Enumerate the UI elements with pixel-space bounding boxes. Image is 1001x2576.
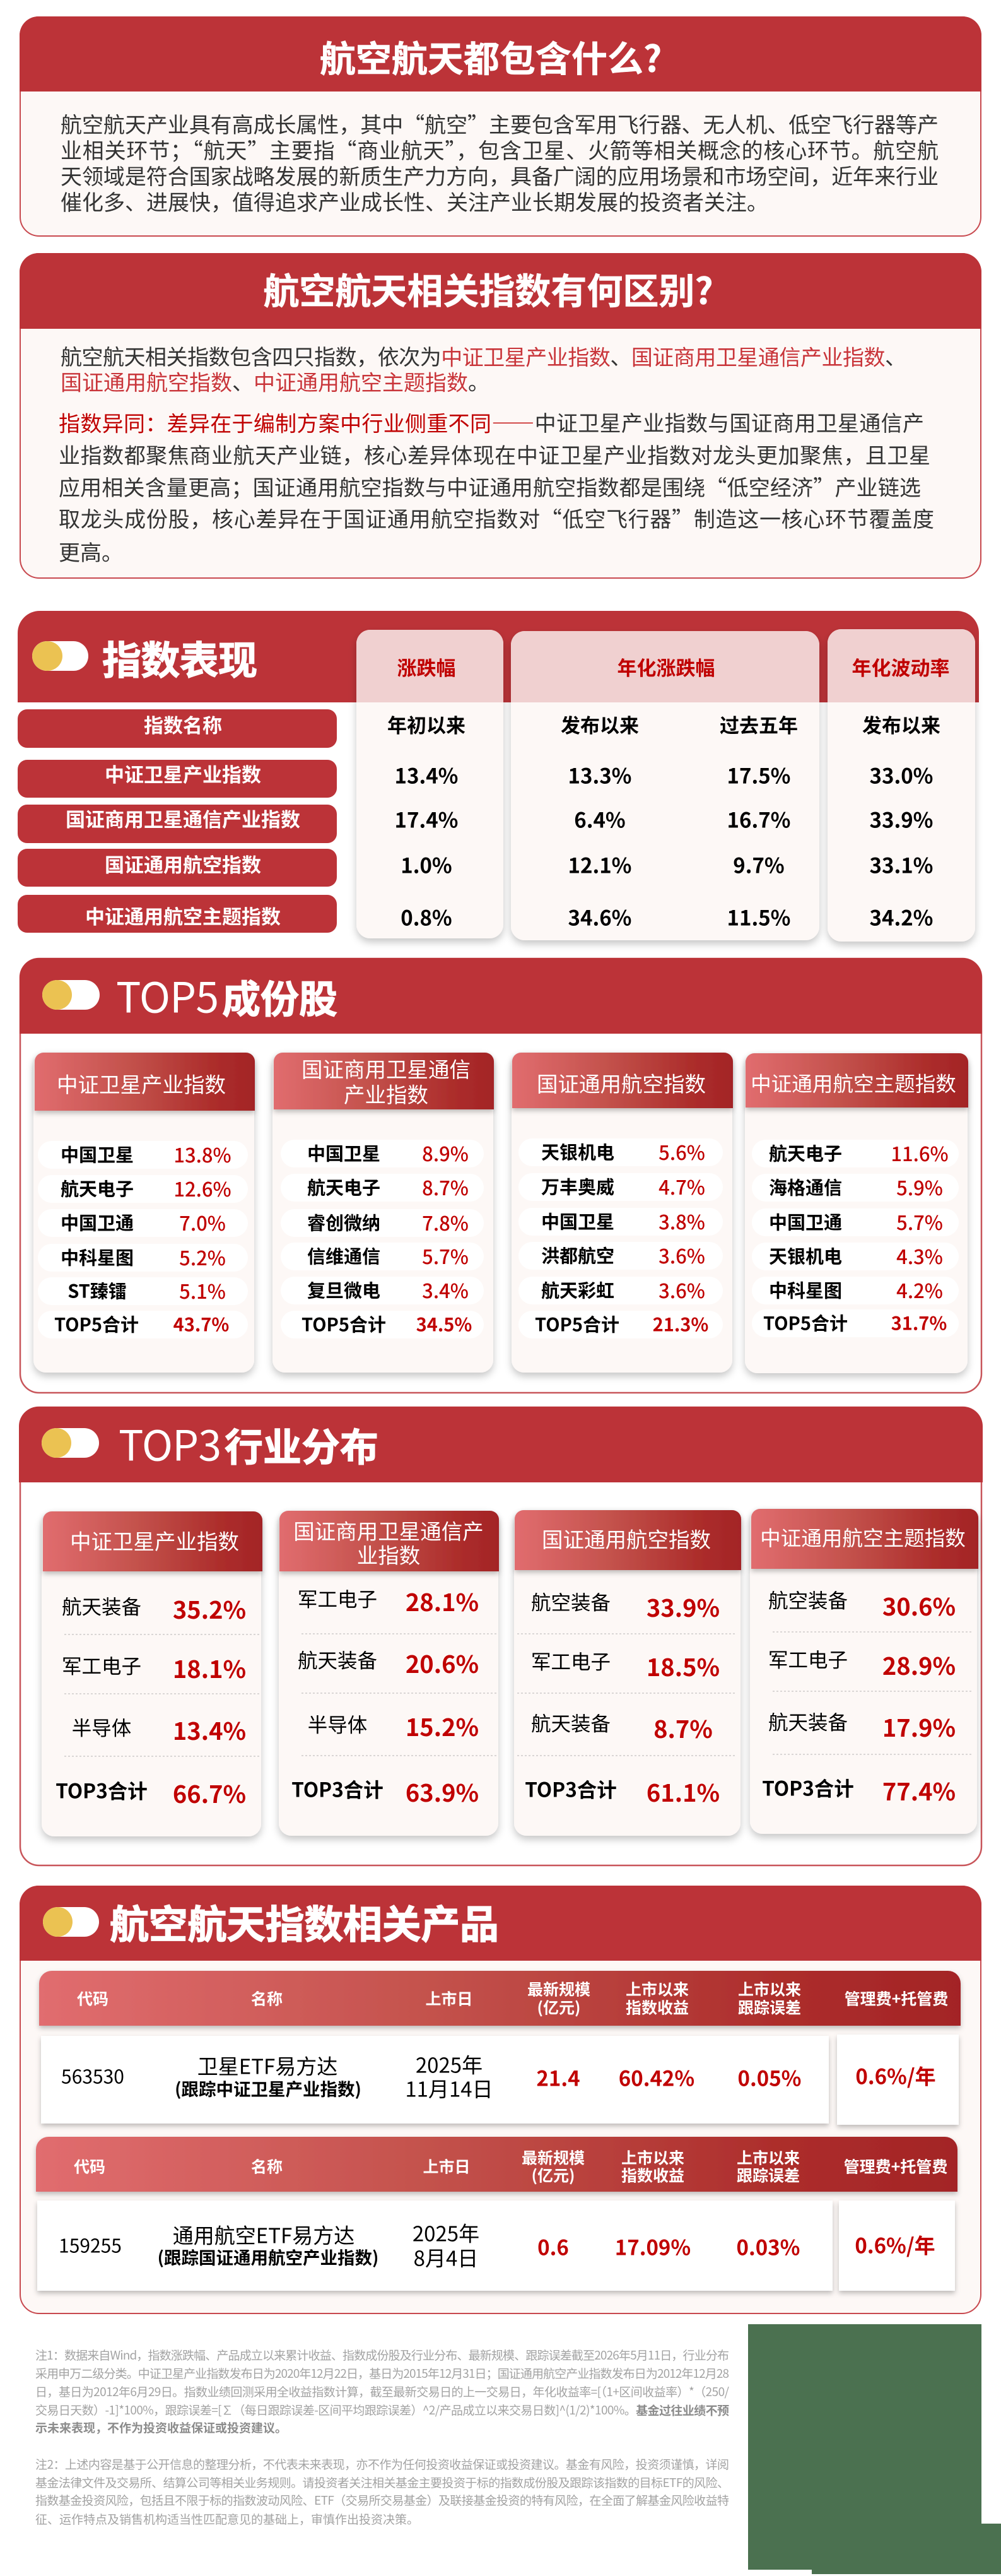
panel: what aerospace includes [20,16,981,236]
card: CNI commercial satellite communication index: 产业指数 [344,1078,428,1109]
card: CNI general aviation index [514,1510,741,1836]
card: CSI general aviation theme index: 中证通用航空主题指数 [751,1068,956,1097]
table: general aviation ETF: 通用航空ETF易方达 [173,2219,354,2249]
column: annualized change: 6.4% [574,804,626,834]
card: CNI commercial satellite communication index: 7.8% [422,1208,469,1236]
table: general aviation ETF: 上市以来 [737,2146,800,2168]
table: satellite ETF [39,1971,961,2125]
card: CNI commercial satellite communication index: 国证商用卫星通信产 [293,1515,484,1545]
card: CNI general aviation index: 国证通用航空指数 [542,1523,711,1554]
card: CNI commercial satellite communication index: 20.6% [406,1645,479,1680]
text block: index similarities and differences: 更高。 [59,536,123,567]
table: satellite ETF: 卫星ETF易方达 [197,2050,337,2080]
column: year to date change: 0.8% [401,901,452,931]
text block: aerospace description: 航空航天产业具有高成长属性，其中“航空”主要包含军用飞行器、无人机、低空飞行器等产 [61,108,939,139]
card: CNI general aviation index: 8.7% [653,1710,713,1745]
text block: index similarities and differences: 指数异同：差异在于编制方案中行业侧重不同——中证卫星产业指数与国证商用卫星通信产 [59,406,924,437]
card: CSI general aviation theme index: 4.3% [896,1241,943,1270]
card: CNI general aviation index: 航空装备 [531,1586,611,1616]
card: CSI general aviation theme index: 30.6% [882,1588,956,1622]
card: CNI commercial satellite communication index: 半导体 [308,1709,367,1738]
card: CSI satellite industry index: 7.0% [179,1208,226,1236]
table: satellite ETF: 2025年 [416,2048,483,2079]
column: year to date change: 年初以来 [387,710,465,738]
card: CSI satellite industry index: 中国卫通 [61,1209,134,1236]
card: CSI satellite industry index: 18.1% [173,1650,246,1685]
table: satellite ETF: 60.42% [619,2062,694,2093]
text block: four indices: 航空航天相关指数包含四只指数，依次为中证卫星产业指数、国证商用卫星通信产业指数、 [61,340,906,371]
card: CNI general aviation index: 33.9% [647,1589,720,1624]
column: annualized volatility: 33.9% [870,804,933,834]
table: general aviation ETF: 名称 [251,2154,283,2177]
card: CNI general aviation index: 天银机电 [541,1138,614,1165]
table: general aviation ETF: 跟踪误差 [737,2163,800,2186]
card: CSI general aviation theme index: 5.7% [896,1207,943,1236]
column: year to date change: 13.4% [395,760,458,790]
table: satellite ETF: 0.05% [738,2062,801,2093]
icon: toggle [42,1428,99,1458]
heading: index performance: 指数表现 [102,629,257,685]
text block: aerospace description: 天领域是符合国家战略发展的新质生产力方向，具备广阔的应用场景和市场空间，近年来行业 [61,160,939,191]
column: annualized change: 过去五年 [720,710,798,738]
text block: note 2: 注2：上述内容是基于公开信息的整理分析，不代表未来表现，亦不作为任何投资收益保证或投资建议。基金有风险，投资须谨慎，详阅 [35,2455,729,2473]
card: CNI general aviation index: 3.8% [659,1207,705,1235]
card: CSI general aviation theme index: 天银机电 [769,1242,842,1268]
table: general aviation ETF: 0.6 [537,2231,569,2262]
card: CNI general aviation index: 3.6% [659,1241,705,1269]
column: annualized change: 16.7% [727,804,790,834]
card: CSI satellite industry index: 军工电子 [62,1651,141,1680]
card: CNI commercial satellite communication index: 15.2% [406,1708,479,1743]
card: CSI general aviation theme index: 海格通信 [769,1174,842,1200]
card: CNI general aviation index: 洪都航空 [541,1242,614,1268]
table: general aviation ETF [36,2137,957,2291]
table: satellite ETF: 上市日 [425,1987,473,2009]
text block: four indices [61,340,906,396]
card: CNI commercial satellite communication index: 8.9% [422,1138,469,1167]
card: CNI commercial satellite communication index: 航天电子 [307,1174,380,1200]
table: general aviation ETF: 最新规模 [522,2146,585,2168]
card: CNI general aviation index: 航天装备 [531,1708,611,1737]
card: CSI satellite industry index: 中证卫星产业指数 [57,1068,226,1099]
table: satellite ETF: 上市以来 [738,1978,801,2000]
row labels: index names: 国证通用航空指数 [105,849,261,878]
table: satellite ETF: 21.4 [536,2062,580,2093]
card: CSI general aviation theme index: 28.9% [882,1647,956,1682]
table: general aviation ETF: 代码 [74,2154,105,2177]
table: general aviation ETF: (跟踪国证通用航空产业指数) [158,2244,378,2269]
card: CSI satellite industry index: 中国卫星 [61,1141,134,1167]
table: general aviation ETF: 管理费+托管费 [844,2154,947,2177]
card: CSI satellite industry index: 航天装备 [62,1592,141,1621]
text block: note 1: 示未来表现，不作为投资收益保证或投资建议。 [35,2419,287,2436]
card: CNI commercial satellite communication index: 业指数 [357,1539,420,1569]
row labels: index names: 中证卫星产业指数 [105,759,261,788]
card: CNI general aviation index: 航天彩虹 [541,1276,614,1303]
text block: index similarities and differences: 应用相关含量更高；国证通用航空指数与中证通用航空指数都是围绕“低空经济”产业链选 [59,471,921,502]
heading: top 5 constituents: TOP5 [116,964,219,1025]
panel: index performance [18,611,979,942]
table: satellite ETF: 代码 [77,1987,108,2009]
card: CSI general aviation theme index [745,1053,968,1373]
card: CSI general aviation theme index: 航空装备 [768,1585,848,1614]
card: CNI commercial satellite communication index: 中国卫星 [307,1140,380,1166]
card: CSI general aviation theme index: 31.7% [891,1309,947,1335]
text block: index similarities and differences: 取龙头成份股，核心差异在于国证通用航空指数对“低空飞行器”制造这一核心环节覆盖度 [59,502,934,533]
table: general aviation ETF: 159255 [59,2230,122,2258]
heading: top 3 industries [119,1412,378,1473]
heading: index differences: 航空航天相关指数有何区别? [263,263,713,314]
card: CSI satellite industry index: TOP3合计 [56,1776,148,1805]
card: CSI satellite industry index: 中科星图 [61,1243,134,1270]
card: CSI satellite industry index: 5.1% [179,1276,226,1304]
table: satellite ETF: 11月14日 [405,2072,493,2103]
card: CSI satellite industry index: 12.6% [173,1174,231,1202]
card: CNI general aviation index: 61.1% [647,1774,720,1809]
table: satellite ETF: (跟踪中证卫星产业指数) [175,2075,361,2100]
text block: note 1: 交易日天数）-1]*100%，跟踪误差=[∑（每日跟踪误差-区间平均跟踪误差）^2/产品成立以来交易日数]^(1/2)*100%。基金过往业绩不预 [35,2401,729,2418]
table: satellite ETF: 跟踪误差 [738,1995,801,2018]
text block: note 2 [35,2455,729,2527]
column: annualized change [511,631,819,940]
column: annualized change: 13.3% [568,760,631,790]
column: annualized change: 17.5% [727,760,790,790]
card: CNI general aviation index: 18.5% [647,1648,720,1683]
card: CNI general aviation index: 3.6% [659,1275,705,1304]
card: CSI satellite industry index [42,1511,262,1836]
column: annualized volatility [828,629,975,942]
card: CNI general aviation index: 国证通用航空指数 [537,1067,706,1098]
card: CSI satellite industry index: 中证卫星产业指数 [70,1525,239,1556]
card: CNI commercial satellite communication index: 国证商用卫星通信 [301,1053,471,1084]
text block: aerospace description: 业相关环节；“航天”主要指“商业航天”，包含卫星、火箭等相关概念的核心环节。航空航 [61,134,939,165]
card: CSI satellite industry index: 5.2% [179,1243,226,1271]
card: CSI general aviation theme index: 4.2% [896,1275,943,1304]
card: CSI general aviation theme index: 中科星图 [769,1276,842,1303]
panel: index differences [20,253,981,578]
green block: redacted area [748,2324,1001,2574]
card: CNI commercial satellite communication index: 信维通信 [307,1242,380,1268]
card: CNI general aviation index: 21.3% [653,1310,708,1337]
table: satellite ETF: 名称 [251,1987,283,2009]
card: CSI general aviation theme index: 11.6% [891,1138,949,1167]
text block: aerospace description [61,108,939,216]
card: CNI general aviation index: 中国卫星 [541,1208,614,1234]
column: annualized volatility: 发布以来 [862,710,940,738]
table: general aviation ETF: 2025年 [413,2218,479,2248]
column: annualized volatility: 34.2% [870,901,933,931]
row labels: index names: 指数名称 [144,710,222,738]
row labels: index names [18,709,337,933]
card: CNI commercial satellite communication index: 军工电子 [298,1584,377,1613]
column: annualized change: 34.6% [568,901,631,931]
text block: aerospace description: 催化多、进展快，值得追求产业成长性、关注产业长期发展的投资者关注。 [61,186,768,216]
card: CNI commercial satellite communication index: 8.7% [422,1173,469,1201]
row labels: index names: 国证商用卫星通信产业指数 [66,804,300,832]
row labels: index names: 中证通用航空主题指数 [85,901,281,930]
column: annualized volatility: 33.1% [870,849,933,880]
column: year to date change: 1.0% [401,849,452,880]
heading: top 5 constituents: 成份股 [222,968,337,1024]
column: annualized change: 年化涨跌幅 [617,653,715,681]
table: satellite ETF: 0.6%/年 [855,2060,936,2090]
card: CSI general aviation theme index: 17.9% [882,1709,956,1744]
heading: what aerospace includes: 航空航天都包含什么? [320,30,662,82]
card: CNI commercial satellite communication index [279,1511,499,1836]
card: CNI commercial satellite communication index: 航天装备 [298,1645,377,1674]
text block: note 1: 日，基日为2012年6月29日。指数业绩回测采用全收益指数计算，截至最新交易日的上一交易日，年化收益率=[（1+区间收益率）*（250/ [35,2383,730,2400]
table: general aviation ETF: 0.6%/年 [855,2229,935,2259]
card: CSI general aviation theme index: 航天装备 [768,1706,848,1735]
icon: toggle [42,980,100,1010]
panel: top 5 constituents [20,958,982,1393]
table: satellite ETF: 管理费+托管费 [845,1987,948,2009]
card: CNI commercial satellite communication index: 3.4% [422,1275,469,1304]
heading: top 3 industries: TOP3 [119,1412,221,1473]
column: annualized change: 发布以来 [561,710,639,738]
card: CSI general aviation theme index [750,1509,978,1834]
text block: note 1: 注1：数据来自Wind，指数涨跌幅、产品成立以来累计收益、指数成份股及行业分布、最新规模、跟踪误差截至2026年5月11日，行业分布 [35,2346,729,2363]
card: CNI general aviation index: TOP3合计 [525,1775,617,1804]
card: CSI general aviation theme index: 5.9% [896,1173,943,1201]
heading: top 5 constituents [116,964,337,1025]
card: CSI satellite industry index: 半导体 [72,1713,131,1742]
panel: related products [20,1886,981,2313]
column: year to date change: 17.4% [395,804,458,834]
text block: note 1 [35,2346,730,2436]
table: general aviation ETF: 上市以来 [621,2146,684,2168]
card: CSI satellite industry index: 13.8% [173,1140,231,1168]
card: CNI general aviation index: 万丰奥威 [541,1173,614,1199]
icon: toggle [43,1907,99,1937]
card: CSI satellite industry index: 35.2% [173,1591,246,1626]
card: CSI general aviation theme index: 中证通用航空主题指数 [760,1522,966,1552]
text block: note 2: 征、运作特点及销售机构适当性匹配意见的基础上，审慎作出投资决策。 [35,2510,419,2527]
card: CNI general aviation index: 5.6% [659,1137,705,1166]
table: satellite ETF: (亿元) [537,1995,580,2018]
card: CSI satellite industry index: 66.7% [173,1775,246,1810]
table: satellite ETF: 最新规模 [527,1978,590,2000]
column: annualized change: 12.1% [568,849,631,880]
card: CNI commercial satellite communication index: 63.9% [406,1774,479,1809]
heading: top 3 industries: 行业分布 [225,1416,378,1472]
card: CNI general aviation index: TOP5合计 [535,1310,619,1337]
text block: note 2: 指数基金投资风险，包括且不限于标的指数波动风险、ETF（交易所交易基金）及联接基金投资的特有风险，在全面了解基金风险收益特 [35,2491,729,2508]
card: CSI satellite industry index: ST臻镭 [67,1277,127,1304]
card: CSI general aviation theme index: TOP5合计 [763,1309,848,1335]
card: CSI satellite industry index: 航天电子 [61,1175,134,1202]
card: CNI general aviation index [512,1053,733,1373]
column: year to date change: 涨跌幅 [397,653,455,681]
card: CNI general aviation index: 军工电子 [531,1646,611,1675]
table: satellite ETF: 563530 [61,2061,124,2089]
card: CNI commercial satellite communication index: TOP5合计 [301,1310,386,1337]
card: CNI general aviation index: 4.7% [659,1172,705,1200]
card: CNI commercial satellite communication index: 睿创微纳 [307,1209,380,1236]
card: CSI general aviation theme index: 军工电子 [768,1645,848,1674]
card: CNI commercial satellite communication index: 复旦微电 [307,1276,380,1303]
card: CSI general aviation theme index: 中国卫通 [769,1208,842,1234]
table: satellite ETF: 指数收益 [626,1995,689,2018]
card: CNI commercial satellite communication index: 34.5% [416,1310,472,1337]
column: annualized change: 9.7% [733,849,785,880]
column: annualized change: 11.5% [727,901,790,931]
table: general aviation ETF: 0.03% [737,2231,800,2262]
table: satellite ETF: 上市以来 [626,1978,689,2000]
card: CSI satellite industry index: TOP5合计 [54,1310,139,1337]
card: CSI general aviation theme index: 航天电子 [769,1140,842,1166]
table: general aviation ETF: (亿元) [532,2163,575,2186]
card: CSI satellite industry index: 13.4% [173,1712,246,1747]
card: CNI commercial satellite communication index: 5.7% [422,1241,469,1270]
icon: toggle [32,641,88,671]
text block: index similarities and differences: 业指数都聚焦商业航天产业链，核心差异体现在中证卫星产业指数对龙头更加聚焦，且卫星 [59,439,930,470]
table: general aviation ETF: 8月4日 [414,2242,478,2272]
card: CNI commercial satellite communication index: 28.1% [406,1583,479,1618]
card: CSI general aviation theme index: TOP3合计 [762,1773,854,1802]
table: general aviation ETF: 上市日 [423,2154,471,2177]
table: general aviation ETF: 指数收益 [621,2163,684,2186]
column: annualized volatility: 年化波动率 [852,653,950,681]
column: annualized volatility: 33.0% [870,760,933,790]
text block: index similarities and differences [59,406,934,567]
text block: note 1: 采用申万二级分类。中证卫星产业指数发布日为2020年12月22日，基日为2015年12月31日；国证通用航空产业指数发布日为2012年12月28 [35,2365,729,2382]
table: general aviation ETF: 17.09% [615,2231,691,2262]
heading: related products: 航空航天指数相关产品 [110,1893,499,1950]
card: CSI satellite industry index [33,1053,255,1373]
column: year to date change [356,630,503,938]
card: CNI commercial satellite communication index: TOP3合计 [291,1775,383,1804]
panel: top 3 industries [19,1407,983,1865]
card: CNI commercial satellite communication index [272,1053,494,1373]
card: CSI satellite industry index: 43.7% [173,1310,229,1337]
text block: note 2: 基金法律文件及交易所、结算公司等相关业务规则。请投资者关注相关基金主要投资于标的指数成份股及跟踪该指数的目标ETF的风险、 [35,2474,729,2491]
card: CSI general aviation theme index: 77.4% [882,1773,956,1807]
text block: four indices: 国证通用航空指数、中证通用航空主题指数。 [61,365,489,396]
